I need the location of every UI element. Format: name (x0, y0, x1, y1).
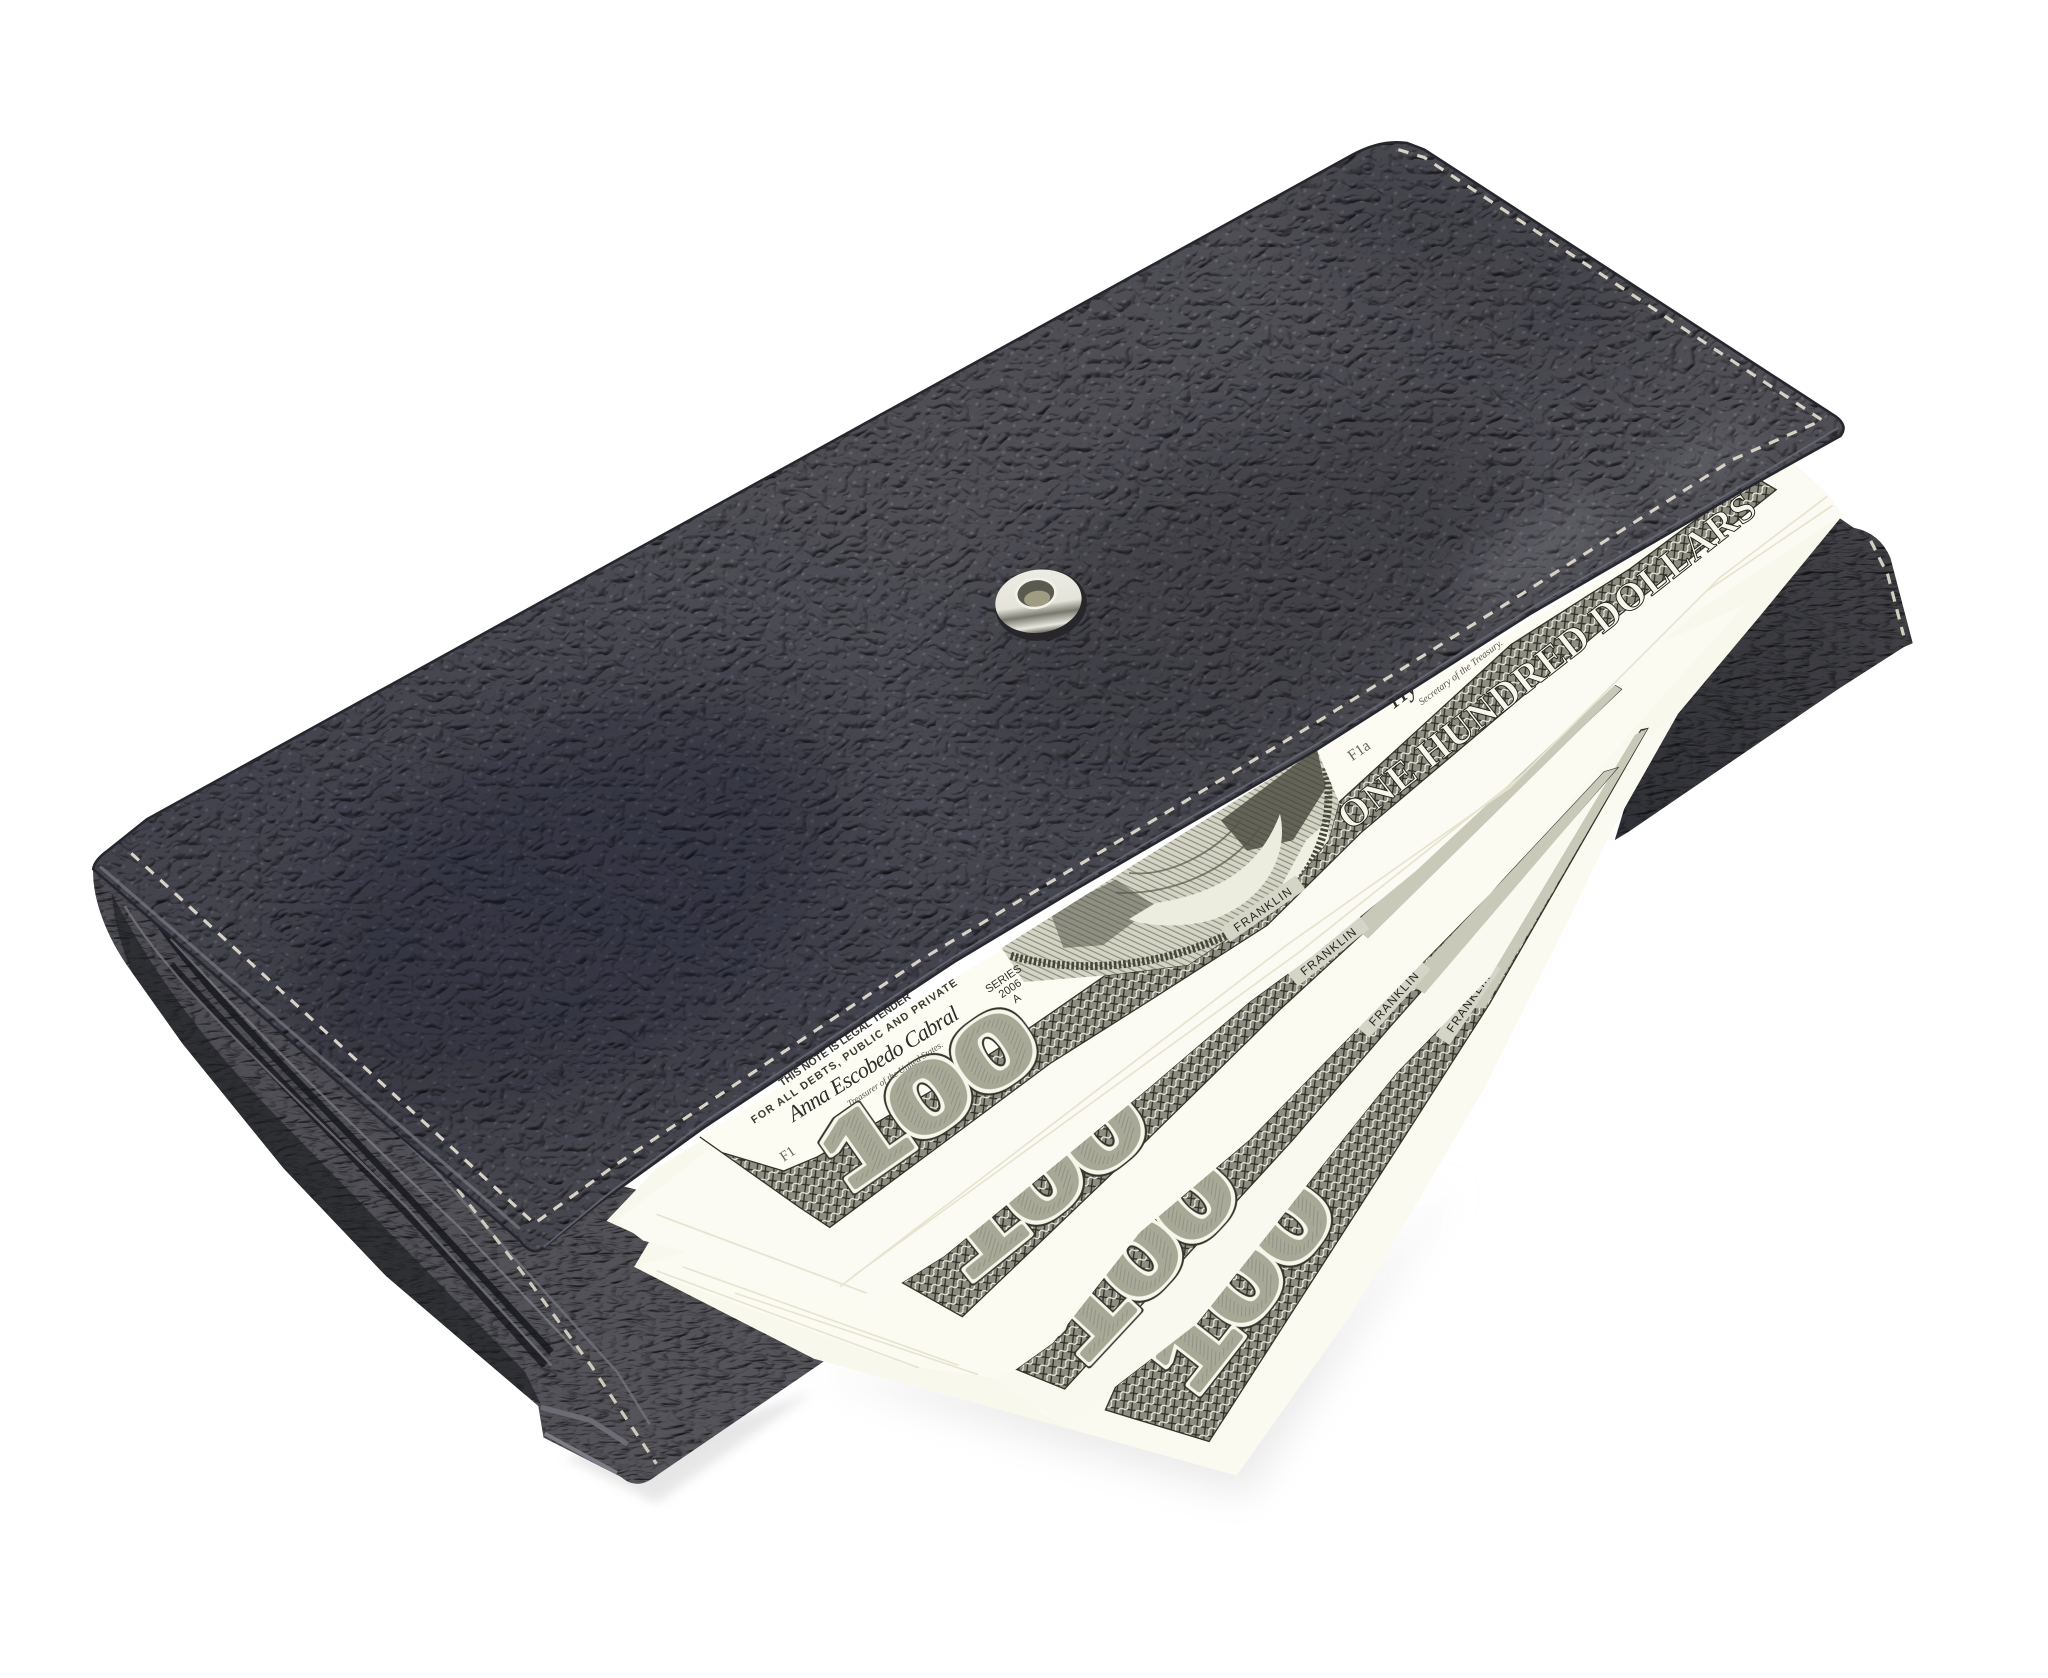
leather shading (289, 692, 841, 1120)
portrait label on note three: FRANKLIN (1366, 968, 1422, 1029)
banknote three (919, 696, 1670, 1427)
treasurer signature: Anna Escobedo Cabral (781, 1001, 963, 1127)
flap stitching (131, 148, 1822, 1224)
wallet front flap (79, 71, 1864, 1273)
numeral 100 on note three: 100 (1024, 1139, 1258, 1379)
portrait label on note two: FRANKLIN (1298, 924, 1360, 978)
series mark: A (1011, 992, 1024, 1006)
plate mark right: F1a (1345, 737, 1374, 765)
denomination words: ONE HUNDRED DOLLARS (1329, 485, 1764, 839)
wallet back lobe on right (1614, 518, 1913, 840)
portrait label on note one: FRANKLIN (1231, 884, 1295, 935)
light leaf tip on note two (1352, 685, 1621, 939)
banknote two (634, 604, 1746, 1378)
treasurer caption: Treasurer of the United States. (845, 1039, 945, 1109)
paper layer edges (656, 496, 1833, 1293)
light leaf tip on note three (1407, 768, 1617, 994)
portrait label on note four (1435, 959, 1501, 1045)
portrait label on note four: FRANKLIN (1444, 970, 1494, 1035)
secretary caption: Secretary of the Treasury. (1417, 638, 1505, 708)
Franklin portrait (1002, 750, 1339, 982)
lower body stitching (433, 1158, 656, 1464)
banknote one on top (617, 465, 1843, 1302)
snap button (991, 564, 1091, 647)
guilloche border band (700, 477, 1776, 1227)
portrait label on note one (1220, 875, 1305, 942)
secretary signature: Hy (1379, 672, 1422, 714)
legal tender text upper line: THIS NOTE IS LEGAL TENDER (777, 990, 913, 1089)
portrait label on note two (1287, 915, 1369, 986)
legal tender text: FOR ALL DEBTS, PUBLIC AND PRIVATE (749, 977, 959, 1126)
banknote stack base (607, 462, 1843, 1473)
series mark: 2006 (997, 977, 1024, 1001)
banknote four (1037, 714, 1678, 1476)
soft shadow under wallet (565, 1182, 1457, 1503)
light leaf tip on note four (1469, 729, 1648, 1008)
illustration: wallet with banknotes (92, 141, 1913, 1503)
series mark: SERIES (983, 963, 1024, 996)
portrait label on note three (1357, 958, 1431, 1038)
leather scale cells (79, 131, 1864, 1273)
printed note face (700, 490, 1776, 1227)
plate mark left: F1 (777, 1143, 799, 1165)
wallet lower body and folded layers (93, 870, 824, 1484)
numeral 100 on note four: 100 (1130, 1162, 1354, 1408)
numeral 100 on note two: 100 (916, 1068, 1166, 1298)
numeral 100 on note one: 100 (802, 987, 1056, 1208)
